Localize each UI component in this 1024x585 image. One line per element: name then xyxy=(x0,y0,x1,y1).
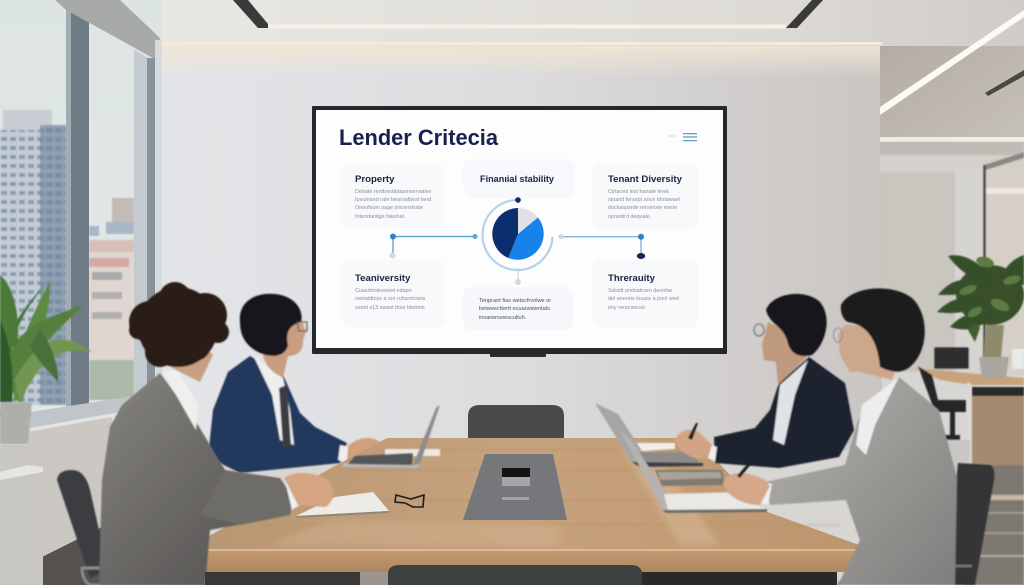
card: team diversity: ownaldtnys a sro ruhsretoans xyxy=(355,296,426,302)
person: foreground left in grey jacket xyxy=(57,282,333,585)
laptops and tablet right xyxy=(595,403,767,513)
neck and face xyxy=(262,310,306,378)
cuff xyxy=(757,482,772,505)
jacket xyxy=(99,373,293,585)
card: property: Ipsumand rate bearoatbest lend xyxy=(355,197,431,203)
wall under window xyxy=(28,417,112,556)
card: threrauity: Threrauity xyxy=(608,273,656,284)
card: property: Oneofsum sage pricenstrate xyxy=(355,205,423,211)
screen frame xyxy=(312,106,727,354)
card: financial stability xyxy=(463,159,575,198)
card: bottom centre: Tenprant fias wetscfrvolwe or xyxy=(479,298,551,304)
monitor xyxy=(934,347,969,369)
pie chart xyxy=(483,197,552,270)
neck and face xyxy=(762,322,807,385)
cuff and hand xyxy=(338,445,349,462)
connector: bottom xyxy=(515,268,521,285)
card: property: Property xyxy=(355,174,395,185)
card: tenant diversity: oprastird dequale. xyxy=(608,214,651,220)
card: property: Debate rentbestdataonservative xyxy=(355,189,431,195)
notebook and glasses left xyxy=(296,492,424,518)
cabinet left xyxy=(0,445,43,585)
icon: right potted plant xyxy=(937,255,1024,378)
chair xyxy=(57,470,108,578)
card: bottom centre: insarwnseesculluh. xyxy=(479,315,527,321)
card: bottom centre: betweecttertt ecuarwstentals xyxy=(479,306,550,312)
window with city view xyxy=(0,0,162,436)
card: tenant diversity: dockaspsrde rervenxie metre xyxy=(608,205,678,211)
right office background xyxy=(880,142,1024,585)
glasses xyxy=(754,324,764,336)
card: tenant diversity xyxy=(593,163,698,230)
card: team diversity xyxy=(341,259,445,327)
floor xyxy=(930,440,970,470)
card: tenant diversity: Cirtaced lest hanate lerek xyxy=(608,189,669,195)
card: property xyxy=(341,163,445,229)
person: far right colleague in dark jacket xyxy=(675,294,854,468)
jacket xyxy=(765,377,957,585)
glasses xyxy=(834,328,842,342)
icon: menu xyxy=(668,133,697,141)
laptop: near colleague in navy xyxy=(343,405,440,468)
card: threrauity: ony rerecinecel. xyxy=(608,305,646,311)
window header xyxy=(55,0,160,62)
shirt and tie xyxy=(253,355,294,445)
neck and face xyxy=(838,325,900,380)
icon: left potted plant xyxy=(0,275,92,444)
card: threrauity xyxy=(593,259,698,328)
card: team diversity: sestd s13 nwast thse tdetmrk xyxy=(355,305,425,311)
card: bottom centre xyxy=(463,287,573,330)
card: financial stability: Finanıial stability xyxy=(480,174,555,185)
cuff xyxy=(708,445,717,462)
person: foreground right in grey jacket xyxy=(723,288,994,585)
slide title: Lender Critecia xyxy=(339,125,498,150)
connector: right xyxy=(558,234,645,259)
office chair xyxy=(918,366,966,440)
hair xyxy=(766,294,827,356)
connector: left xyxy=(390,234,478,258)
shirt collar xyxy=(163,370,198,430)
wall mount xyxy=(490,350,546,357)
chair xyxy=(945,463,994,585)
table xyxy=(193,438,859,572)
ceiling with light strips xyxy=(120,0,1024,145)
neck xyxy=(170,340,213,382)
glasses xyxy=(297,322,307,331)
card: team diversity: Teaniversity xyxy=(355,273,411,284)
hair xyxy=(841,288,925,372)
back chair at table xyxy=(468,405,564,438)
card: team diversity: Cuasdmstrewest edapo xyxy=(355,288,412,294)
hands and pen xyxy=(723,473,770,505)
front chair at table xyxy=(388,565,642,585)
left floor xyxy=(0,522,112,585)
shirt xyxy=(773,360,808,445)
slide content xyxy=(339,125,698,330)
card: threrauity: del enorets Isuare a pool wed xyxy=(608,296,679,302)
mullion xyxy=(66,8,71,408)
hands and pen xyxy=(675,430,712,458)
side frame xyxy=(134,50,147,400)
desk xyxy=(914,368,1024,385)
card: property: Intendantige fakehat. xyxy=(355,214,405,220)
jacket xyxy=(714,357,854,468)
center table mat with devices xyxy=(463,454,567,520)
cuff and hands xyxy=(284,474,300,510)
card: tenant diversity: stoand fersopt ance trintawael xyxy=(608,197,680,203)
person: far left colleague in navy xyxy=(208,294,385,473)
jacket xyxy=(208,356,347,473)
wall display xyxy=(312,106,727,357)
floor below table xyxy=(205,572,837,585)
shirt xyxy=(856,377,899,455)
card: threrauity: Sdotdt pndsatrsen deonfse xyxy=(608,288,672,294)
card: tenant diversity: Tenant Diversity xyxy=(608,174,683,185)
hair xyxy=(240,294,302,356)
hair xyxy=(129,282,229,367)
